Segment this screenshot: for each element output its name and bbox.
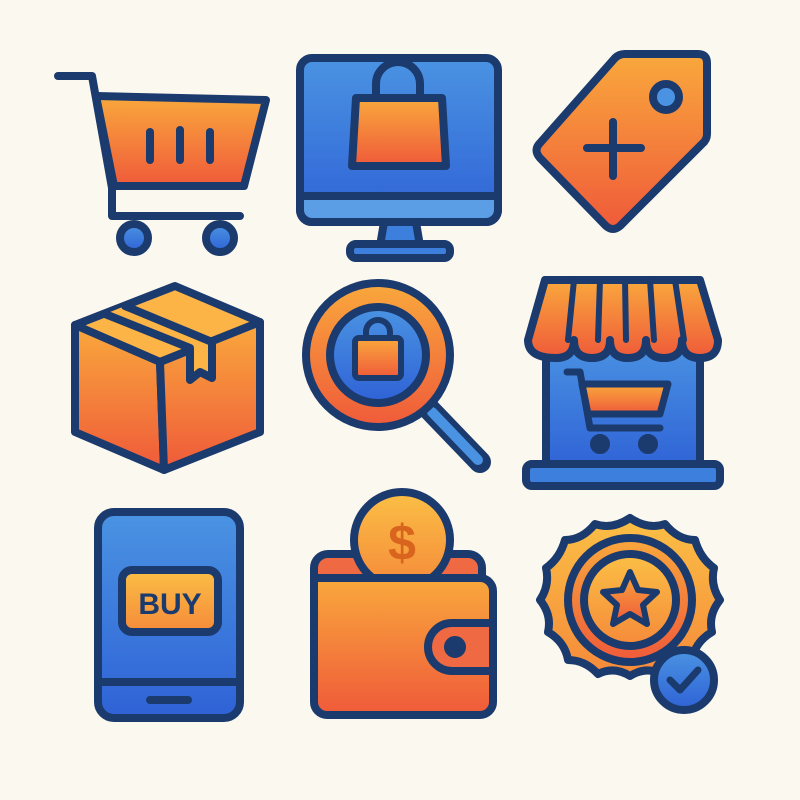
- icon: wallet with coin: $: [388, 515, 416, 571]
- icon: wallet with coin: [314, 492, 493, 715]
- icon: smartphone with BUY button: BUY: [138, 588, 202, 621]
- icon: price tag with plus: [536, 54, 707, 229]
- icon: cardboard box: [75, 286, 260, 470]
- icon: magnifier with bag: [306, 283, 480, 462]
- icon: shopping cart: [58, 76, 266, 252]
- icon: smartphone with BUY button: [98, 512, 240, 718]
- icon: quality badge with check: [540, 518, 720, 710]
- icon: computer with shopping bag: [300, 58, 498, 258]
- icon: storefront with cart: [526, 280, 720, 486]
